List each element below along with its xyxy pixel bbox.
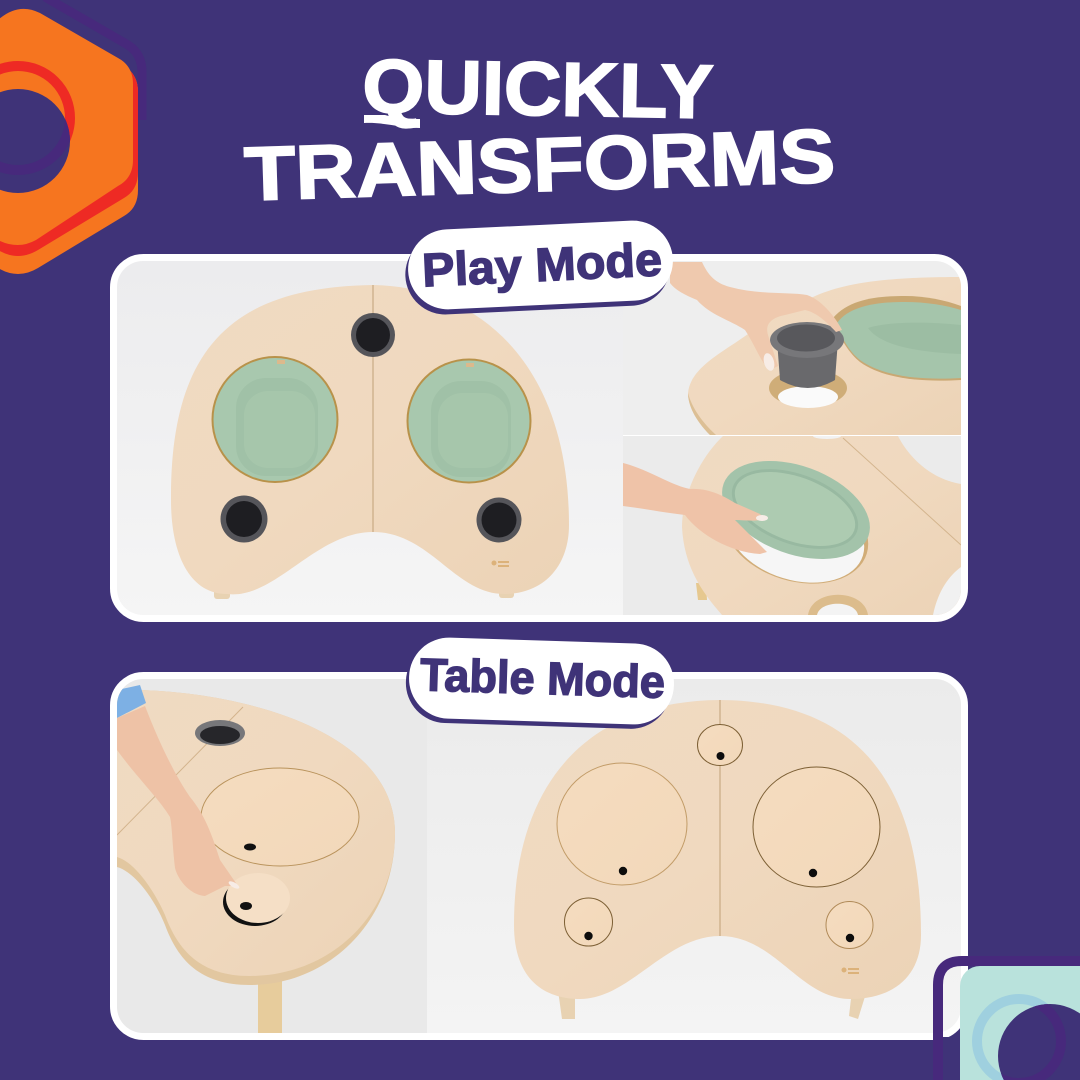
hand	[670, 262, 842, 370]
badge: table mode: Table Mode	[419, 648, 666, 708]
recessed cup	[195, 720, 245, 746]
panel: play mode	[114, 258, 964, 618]
cup bottom right	[476, 498, 522, 542]
cup top	[351, 313, 395, 357]
title: QUICKLY	[362, 44, 714, 135]
grey cup	[770, 322, 844, 388]
large lid	[201, 768, 359, 866]
badge: play mode	[403, 219, 675, 316]
bowl right	[406, 358, 532, 484]
panel: table mode	[114, 676, 964, 1036]
logo mark	[492, 560, 509, 567]
arm and hand	[623, 463, 767, 554]
badge: table mode	[405, 636, 675, 730]
badge: play mode: Play Mode	[421, 232, 663, 297]
lids and finger holes	[557, 724, 880, 948]
photo: table mode right view	[427, 679, 961, 1033]
bowl left	[212, 356, 338, 483]
photo: placing lid	[117, 679, 427, 1036]
photo: play mode table top view	[117, 261, 623, 615]
title: TRANSFORMS	[243, 114, 836, 217]
arm and hand	[117, 706, 238, 896]
decorative hexagon nut top-left	[0, 0, 142, 274]
sleeve	[117, 685, 146, 718]
decorative rounded square bottom-right	[938, 961, 1080, 1080]
cup bottom left	[220, 496, 268, 542]
title	[243, 44, 836, 217]
logo mark	[842, 968, 859, 974]
photo: placing bowl	[623, 433, 961, 615]
small lid being placed	[223, 873, 290, 926]
photo: placing cup	[623, 261, 961, 435]
green bowl	[722, 461, 870, 559]
